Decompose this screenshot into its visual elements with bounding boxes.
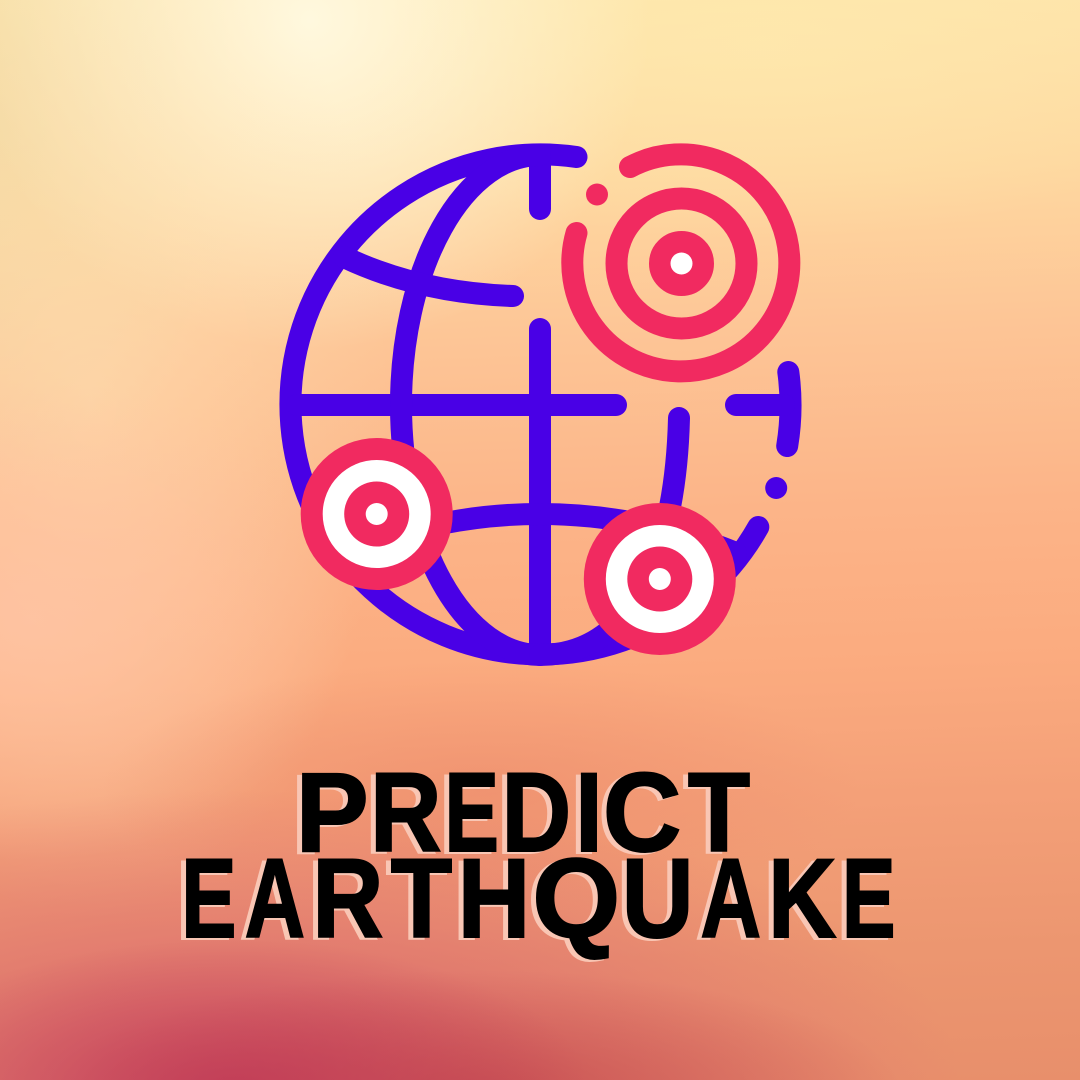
- title letters: T: [391, 836, 452, 961]
- title letters: Q: [532, 835, 620, 961]
- title shadow: E: [837, 838, 890, 963]
- title shadow: T: [386, 838, 447, 963]
- title shadow: I: [570, 753, 598, 877]
- title shadow: Q: [527, 837, 615, 963]
- title letters: H: [458, 836, 530, 961]
- icon: globe with earthquake markers: [290, 154, 791, 655]
- title letters: E: [444, 749, 499, 875]
- seismic target rings: [572, 154, 789, 371]
- title letters: T: [688, 749, 750, 875]
- title: Predict Earthquake: [176, 749, 895, 963]
- title shadow: [176, 751, 890, 963]
- title shadow: K: [763, 837, 831, 963]
- right quake marker: [584, 503, 736, 655]
- title letters: R: [312, 837, 383, 961]
- title shadow: E: [176, 838, 231, 963]
- title shadow: T: [683, 751, 745, 877]
- title shadow: R: [365, 752, 436, 877]
- title shadow: A: [240, 838, 300, 963]
- title shadow: D: [497, 752, 566, 878]
- left quake marker: [301, 438, 453, 590]
- title shadow: R: [307, 839, 378, 963]
- title letters: D: [502, 750, 571, 876]
- title shadow: E: [440, 751, 494, 877]
- title shadow: U: [617, 839, 689, 963]
- title shadow: H: [453, 838, 525, 963]
- title letters: R: [370, 750, 441, 875]
- title shadow: A: [696, 837, 756, 963]
- title letters: I: [575, 751, 603, 875]
- title shadow: C: [598, 752, 676, 877]
- title letters: E: [181, 836, 236, 961]
- title letters: A: [700, 835, 761, 961]
- title letters: U: [622, 837, 694, 961]
- title letters: A: [245, 836, 305, 961]
- title shadow: P: [291, 753, 364, 877]
- title letters: C: [603, 750, 681, 875]
- title letters: K: [768, 835, 836, 961]
- title letters: E: [842, 836, 895, 961]
- title letters: P: [296, 751, 369, 875]
- globe grid lines: [290, 154, 791, 655]
- title letters: [181, 749, 895, 961]
